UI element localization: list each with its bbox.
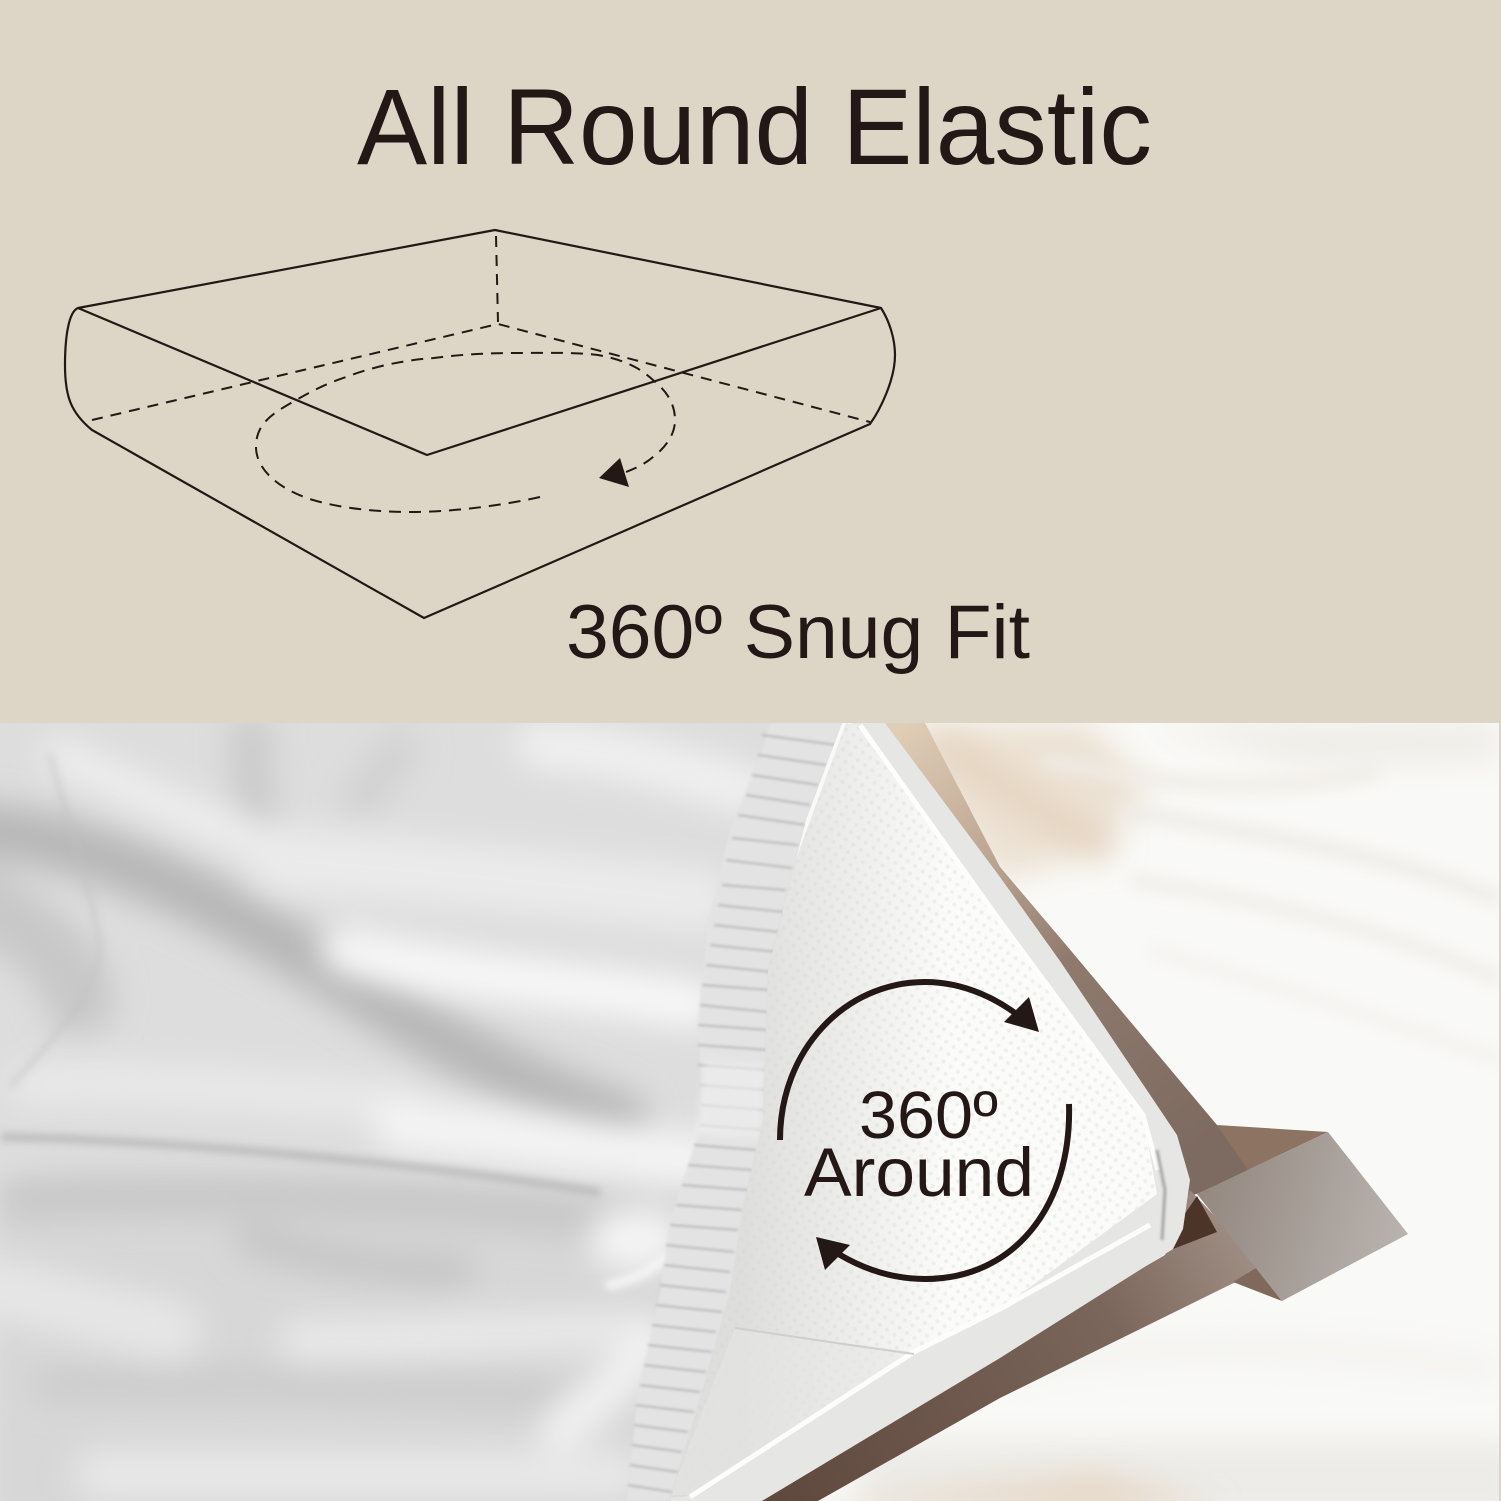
lower knit panel: [904, 1352, 910, 1356]
label: 360 around: [804, 1091, 1030, 1196]
mattress corner: [640, 723, 1190, 1501]
mattress edge strip: [640, 723, 1190, 1501]
solid sheet outline: [78, 230, 881, 455]
lower sheet tone: [0, 1180, 760, 1501]
blurred wooden floor background: [796, 723, 1499, 1501]
leg front: [1197, 1132, 1408, 1301]
dashed inner lines: [92, 236, 870, 422]
title: All Round Elastic: [357, 66, 1152, 187]
panel: bed photo illustration: [0, 723, 1501, 1501]
caption: 360 snug fit: 360º Snug Fit: [566, 590, 1030, 675]
leg top: [1217, 1125, 1328, 1170]
right edge stripe: [1499, 723, 1501, 1501]
corner seam: [1157, 1150, 1165, 1240]
dashed circular arrow path: [256, 353, 675, 512]
diagram: mattress with fitted sheet outline: [65, 230, 895, 618]
sheet highlights: [0, 745, 745, 1475]
fitted sheet: [0, 723, 860, 1501]
leg underside: [1233, 1268, 1282, 1301]
circular arrows: 360 around: [780, 982, 1069, 1279]
side rail, upper: [884, 723, 1250, 1200]
sheet soft shadows: [0, 723, 654, 1286]
lower arc arrow: [816, 1104, 1069, 1279]
arrow head: [599, 458, 629, 487]
wooden bed frame: [740, 723, 1408, 1501]
curved sides and bottom edge: [65, 308, 895, 618]
label: 360 around: 360º: [859, 1078, 998, 1153]
soft fold lines: [4, 755, 665, 1285]
label: 360 around: Around: [804, 1134, 1034, 1211]
panel: beige header: [0, 0, 1501, 723]
gathered band bright section: [699, 1064, 764, 1132]
side rail, lower: [740, 1190, 1264, 1501]
upper arc arrow: [780, 982, 1039, 1140]
mattress piping highlight: [860, 725, 1158, 1170]
elastic gathered band: [627, 723, 842, 1501]
mattress knit top: [784, 724, 1157, 1360]
